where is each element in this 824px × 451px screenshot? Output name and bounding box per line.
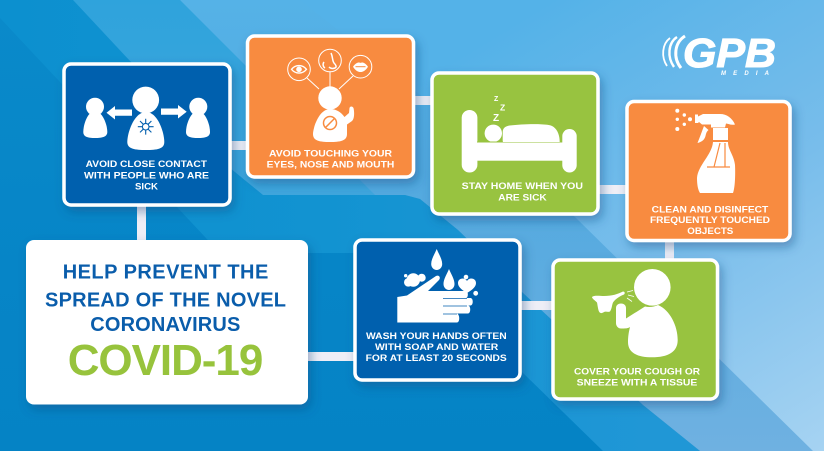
caption <box>366 330 507 363</box>
panel: cover cough <box>553 260 718 399</box>
caption: WASH YOUR HANDS OFTEN <box>366 330 507 341</box>
heading: CORONAVIRUS <box>90 314 240 336</box>
caption: COVER YOUR COUGH OR <box>574 365 700 376</box>
COVID-19 title: COVID-19 <box>68 336 263 385</box>
caption: AVOID CLOSE CONTACT <box>86 158 207 169</box>
panel: wash hands <box>355 240 520 380</box>
connector: card one to headline <box>137 204 146 242</box>
caption: EYES, NOSE AND MOUTH <box>267 159 395 170</box>
connector: card four to card six <box>665 240 674 260</box>
heading: HELP PREVENT THE <box>63 261 268 283</box>
icon: person sneezing into tissue <box>592 269 678 357</box>
icon: hand with water drops and soap <box>397 249 478 322</box>
logo: GPB Media: GPB <box>683 30 776 76</box>
logo: GPB Media: MEDIA <box>721 71 769 77</box>
caption: SNEEZE WITH A TISSUE <box>577 376 697 387</box>
icon: three people with arrows and virus <box>83 87 210 150</box>
icon: person sleeping in bed: Z <box>500 102 505 112</box>
caption: WITH PEOPLE WHO ARE <box>84 169 209 180</box>
caption: ARE SICK <box>498 191 547 202</box>
icon: person sleeping in bed <box>462 96 577 172</box>
heading: SPREAD OF THE NOVEL <box>45 290 286 312</box>
caption <box>462 180 583 202</box>
panel: avoid touching face <box>248 36 414 177</box>
heading <box>45 261 286 336</box>
icon: person with eye, nose and mouth <box>288 49 372 142</box>
caption <box>650 203 770 236</box>
icon: spray bottle <box>675 109 735 193</box>
connector: card three to card four <box>598 185 627 194</box>
panel: headline <box>26 240 308 404</box>
caption <box>267 148 395 170</box>
caption: WITH SOAP AND WATER <box>375 341 499 352</box>
icon: person sleeping in bed: Z <box>494 96 499 103</box>
caption: FREQUENTLY TOUCHED <box>650 214 770 225</box>
caption: AVOID TOUCHING YOUR <box>269 148 392 159</box>
caption <box>574 365 700 387</box>
caption: OBJECTS <box>687 225 733 236</box>
icon: person sleeping in bed: Z <box>493 113 499 124</box>
panel: clean and disinfect <box>627 102 790 240</box>
caption: CLEAN AND DISINFECT <box>652 203 769 214</box>
caption: STAY HOME WHEN YOU <box>462 180 583 191</box>
panel: avoid close contact <box>64 64 230 205</box>
panel: stay home <box>432 73 598 214</box>
caption: SICK <box>135 180 158 191</box>
connector: card five to card six <box>519 301 553 310</box>
connector: card one to card two <box>229 141 247 150</box>
caption: FOR AT LEAST 20 SECONDS <box>366 352 507 363</box>
caption <box>84 158 209 191</box>
connector: card two to card three <box>413 96 432 105</box>
connector: headline to card five <box>306 352 355 361</box>
